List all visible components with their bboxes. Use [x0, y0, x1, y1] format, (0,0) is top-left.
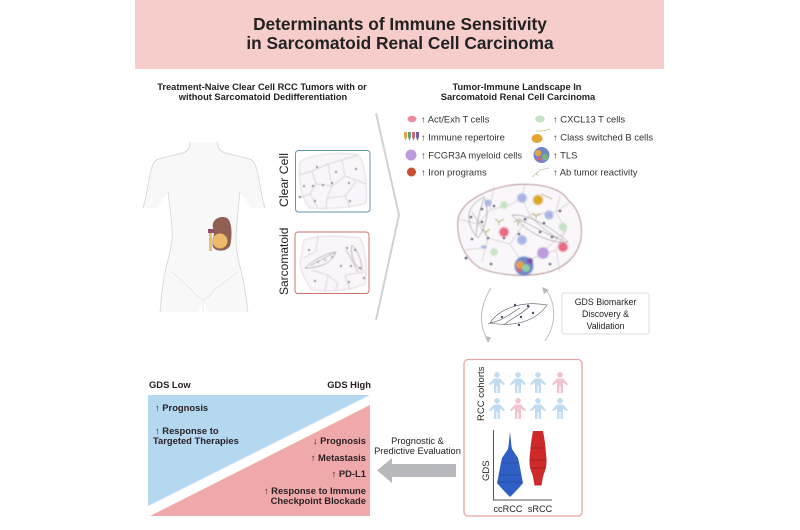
label: violin categories: sRCC	[528, 504, 553, 514]
label: RCC cohorts: RCC cohorts	[476, 366, 487, 421]
icon: B cell	[532, 129, 550, 143]
label: clear cell: Clear Cell	[277, 153, 291, 207]
arrow: to outcomes	[377, 458, 456, 483]
panel: GDS high triangle	[150, 405, 370, 516]
panel: GDS high triangle: ↑ Response to Immune	[264, 485, 366, 496]
label: violin categories	[493, 504, 553, 514]
icon: human torso with kidney	[143, 142, 265, 312]
icon: TLS	[534, 147, 550, 163]
legend text: FCGR3A: ↑ FCGR3A myeloid cells	[421, 150, 522, 160]
panel: GDS high triangle: ↓ Prognosis	[313, 435, 366, 446]
heading: treatment-naive tumors: without Sarcomatoid Dedifferentiation	[178, 92, 348, 102]
label: prognostic and predictive evaluation: Predictive Evaluation	[374, 446, 461, 456]
title banner: in Sarcomatoid Renal Cell Carcinoma	[246, 33, 554, 53]
label: GDS axis: GDS	[481, 460, 492, 481]
heading: tumor-immune landscape: Tumor-Immune Landscape In	[453, 82, 582, 92]
title banner	[135, 0, 664, 69]
legend text: iron programs: ↑ Iron programs	[421, 166, 487, 178]
heading: tumor-immune landscape: Sarcomatoid Renal Cell Carcinoma	[441, 92, 596, 102]
icon: myeloid cell	[406, 150, 416, 160]
icon: iron	[407, 168, 416, 176]
legend: immune features	[404, 114, 653, 178]
heading: treatment-naive tumors: Treatment-Naive Clear Cell RCC Tumors with or	[157, 82, 367, 92]
panel: GDS low triangle: Targeted Therapies	[153, 435, 239, 446]
label: prognostic and predictive evaluation: Prognostic &	[391, 436, 445, 446]
icon: immune repertoire	[404, 132, 419, 141]
legend text: TLS: ↑ TLS	[553, 150, 577, 160]
label: violin categories: ccRCC	[493, 504, 523, 514]
callout: GDS biomarker: GDS Biomarker	[575, 297, 636, 307]
icons: patient cohort	[489, 372, 568, 419]
label: sarcomatoid: Sarcomatoid	[277, 228, 291, 295]
heading: tumor-immune landscape	[441, 82, 596, 102]
panel: sarcomatoid tumor	[295, 232, 369, 294]
legend text: act/exh T cells: ↑ Act/Exh T cells	[421, 114, 490, 124]
panel: GDS low triangle	[148, 395, 370, 506]
callout: GDS biomarker: Validation	[587, 321, 625, 331]
panel: clear cell tumor	[296, 150, 370, 212]
icon: sarcomatoid cell cluster	[488, 304, 547, 326]
chart: violin plot	[494, 430, 552, 500]
title banner: Determinants of Immune Sensitivity	[253, 14, 547, 34]
panel: GDS low triangle: ↑ Response to	[155, 425, 219, 436]
icon: act/exh T cell	[408, 116, 416, 122]
icon: antibody reactivity	[532, 168, 549, 177]
legend text: class switched B cells: ↑ Class switched B cells	[553, 132, 653, 142]
legend text: CXCL13: ↑ CXCL13 T cells	[553, 114, 625, 124]
icon: CXCL13 T cell	[535, 116, 545, 122]
diagram: tumor immune landscape	[458, 184, 581, 276]
panel: GDS high triangle: ↑ Metastasis	[311, 452, 366, 463]
legend text: immune repertoire: ↑ Immune repertoire	[421, 132, 505, 142]
panel: GDS low triangle: ↑ Prognosis	[155, 402, 208, 413]
arrow: curved right	[542, 287, 554, 341]
panel: GDS high triangle: Checkpoint Blockade	[271, 495, 366, 506]
panel: RCC cohorts and GDS violin	[464, 360, 582, 516]
heading: treatment-naive tumors	[157, 82, 367, 102]
panel: GDS high triangle: ↑ PD-L1	[332, 468, 366, 479]
callout: GDS biomarker	[562, 293, 649, 334]
label: prognostic and predictive evaluation	[374, 436, 461, 456]
arrow: divider chevron	[376, 113, 399, 320]
callout: GDS biomarker: Discovery &	[582, 309, 629, 319]
label: GDS high: GDS High	[327, 379, 371, 390]
label: GDS low: GDS Low	[149, 379, 191, 390]
legend text: Ab tumor reactivity: ↑ Ab tumor reactivity	[553, 166, 638, 178]
arrow: curved left	[482, 288, 491, 343]
